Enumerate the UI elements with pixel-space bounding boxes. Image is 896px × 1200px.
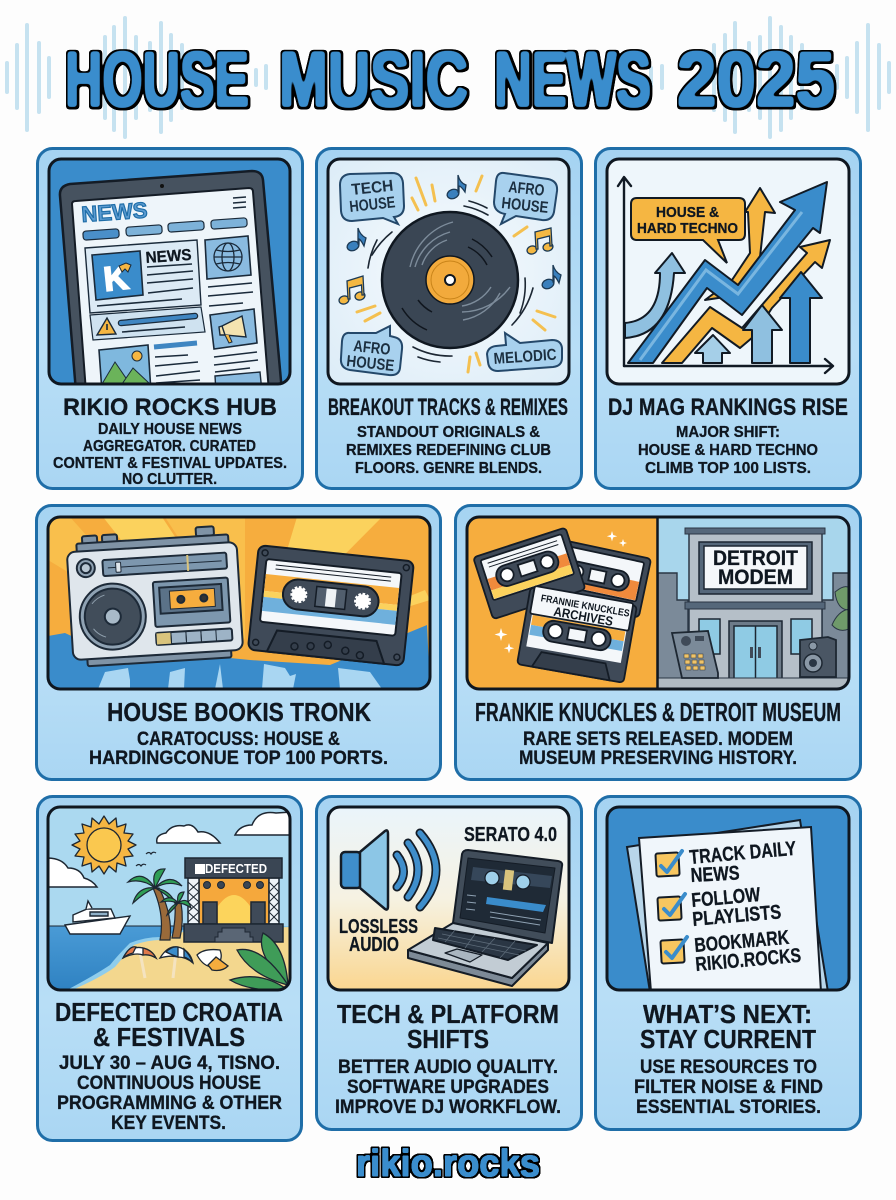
checklist text: FOLLOW (691, 884, 761, 912)
icon: foreground leaf (230, 933, 288, 990)
panel: Defected Croatia & Festivals (38, 796, 302, 1140)
icon: beach umbrellas (123, 947, 228, 978)
callout: house and hard techno: HOUSE & (656, 204, 719, 221)
callout: house and hard techno: HARD TECHNO (637, 220, 738, 237)
label: lossless audio: LOSSLESS (339, 916, 418, 938)
text block: USE RESOURCES TO (640, 1057, 817, 1078)
illustration: news tablet: NEWS (81, 197, 148, 227)
icon: stage (184, 858, 283, 942)
footer url: rikio.rocks (356, 1143, 540, 1185)
icon: archive cassettes (473, 527, 651, 683)
illustration: boombox and cassette (48, 517, 430, 689)
heading: & FESTIVALS (93, 1022, 245, 1052)
title: 2025 (677, 35, 835, 123)
text block: IMPROVE DJ WORKFLOW. (335, 1097, 561, 1118)
text block (346, 424, 551, 477)
icon: checkbox one (655, 851, 682, 877)
label: lossless audio (340, 918, 418, 952)
illustration: checklist (607, 807, 849, 992)
text block: NO CLUTTER. (122, 471, 217, 488)
title: HOUSE (65, 35, 249, 123)
title (65, 35, 835, 123)
heading: STAY CURRENT (640, 1024, 816, 1054)
chart: rising arrows (607, 159, 849, 384)
text block (335, 1057, 561, 1118)
title: NEWS (494, 35, 651, 123)
text block: HOUSE & HARD TECHNO (638, 442, 818, 459)
icon: cassette (248, 545, 414, 666)
text block: SOFTWARE UPGRADES (347, 1077, 549, 1098)
heading: BREAKOUT TRACKS & REMIXES (328, 394, 568, 421)
checklist text: RIKIO.ROCKS (695, 945, 802, 976)
heading: SHIFTS (407, 1024, 489, 1054)
callout: afro house: AFRO (508, 179, 545, 200)
icon: laptop (408, 850, 562, 986)
text block: BETTER AUDIO QUALITY. (338, 1057, 558, 1078)
text block (53, 421, 287, 488)
icon: checkbox three (660, 937, 687, 964)
illustration: Detroit museum: MODEM (718, 566, 793, 589)
panel: Breakout Tracks & Remixes (316, 148, 582, 488)
text block: REMIXES REDEFINING CLUB (346, 442, 551, 459)
panel: Rikio Rocks Hub (38, 148, 302, 488)
heading (640, 999, 816, 1054)
text block: ESSENTIAL STORIES. (636, 1097, 821, 1118)
callout: melodic: MELODIC (493, 347, 557, 368)
callout: afro house lower: HOUSE (346, 353, 395, 375)
panel: House Bookis Tronk (36, 506, 440, 780)
text block: CONTINUOUS HOUSE (77, 1073, 261, 1094)
icon: archive cassettes: FRANNIE KNUCKLES (540, 593, 631, 620)
checklist text: PLAYLISTS (692, 901, 782, 931)
text block: CLIMB TOP 100 LISTS. (645, 460, 811, 477)
text block: KEY EVENTS. (111, 1113, 226, 1134)
illustration: news tablet: NEWS (145, 247, 192, 267)
icon: yacht (65, 901, 130, 934)
text block: MAJOR SHIFT: (676, 424, 780, 441)
icon: speaker (341, 830, 388, 910)
icon: sound waves (397, 833, 436, 907)
heading: RIKIO ROCKS HUB (63, 394, 277, 421)
text block: RARE SETS RELEASED. MODEM (523, 729, 793, 750)
text block (57, 1053, 282, 1134)
text block: PROGRAMMING & OTHER (57, 1093, 282, 1114)
text block: FLOORS. GENRE BLENDS. (355, 460, 542, 477)
icon: boombox (66, 525, 244, 667)
heading: DEFECTED CROATIA (55, 997, 283, 1027)
illustration: speaker and laptop: SERATO 4.0 (464, 824, 557, 846)
callout: afro house lower: AFRO (353, 338, 391, 359)
callout: tech house: TECH (351, 178, 394, 199)
callout: tech house (340, 173, 404, 224)
text block: MUSEUM PRESERVING HISTORY. (519, 748, 797, 769)
illustration: vinyl record (328, 159, 569, 384)
illustration: Detroit museum (658, 528, 849, 689)
callout: tech house: HOUSE (349, 194, 396, 216)
text block (519, 729, 797, 769)
text block (634, 1057, 823, 1118)
checklist text: TRACK DAILY (689, 838, 798, 869)
callout: afro house (494, 173, 557, 224)
text block: JULY 30 – AUG 4, TISNO. (59, 1053, 280, 1074)
checklist text: BOOKMARK (694, 927, 791, 957)
checklist text (689, 838, 802, 976)
label: lossless audio: AUDIO (349, 934, 399, 956)
heading: DJ MAG RANKINGS RISE (608, 394, 848, 421)
panel: Tech & Platform Shifts (316, 796, 582, 1130)
callout: melodic (487, 333, 562, 371)
illustration: cassette archives (467, 517, 849, 689)
text block: STANDOUT ORIGINALS & (357, 424, 540, 441)
illustration: speaker and laptop (328, 807, 569, 990)
heading: WHAT’S NEXT: (643, 999, 812, 1029)
text block: DAILY HOUSE NEWS (98, 421, 242, 438)
panel: Frankie Knuckles & Detroit Museum (456, 506, 860, 780)
callout: afro house lower (341, 326, 402, 375)
heading: TECH & PLATFORM (337, 999, 559, 1029)
illustration: Detroit museum: DETROIT (713, 547, 798, 570)
panel: What's Next (596, 796, 860, 1130)
icon: palm trees (128, 869, 191, 940)
icon: stage: DEFECTED (205, 861, 267, 876)
text block (89, 729, 388, 769)
illustration: news tablet: K (102, 259, 131, 299)
callout: house and hard techno (631, 198, 745, 263)
icon: music notes (338, 175, 561, 305)
heading (337, 999, 559, 1054)
heading (55, 997, 283, 1052)
text block: HARDINGCONUE TOP 100 PORTS. (89, 748, 388, 769)
illustration: news tablet (49, 159, 290, 392)
icon: archive cassettes: ARCHIVES (552, 604, 614, 629)
panel: DJ Mag Rankings Rise (596, 148, 860, 488)
text block: FILTER NOISE & FIND (634, 1077, 823, 1098)
icon: sun (72, 816, 136, 874)
heading: HOUSE BOOKIS TRONK (107, 697, 371, 727)
title: MUSIC (279, 35, 468, 123)
checklist text: NEWS (690, 862, 740, 887)
illustration: beach festival (47, 807, 292, 990)
callout: afro house: HOUSE (501, 195, 549, 217)
text block (638, 424, 818, 477)
text block: CONTENT & FESTIVAL UPDATES. (53, 455, 287, 472)
text block: CARATOCUSS: HOUSE & (137, 729, 340, 750)
text block: AGGREGATOR. CURATED (83, 438, 256, 455)
icon: checkbox two (657, 894, 685, 921)
